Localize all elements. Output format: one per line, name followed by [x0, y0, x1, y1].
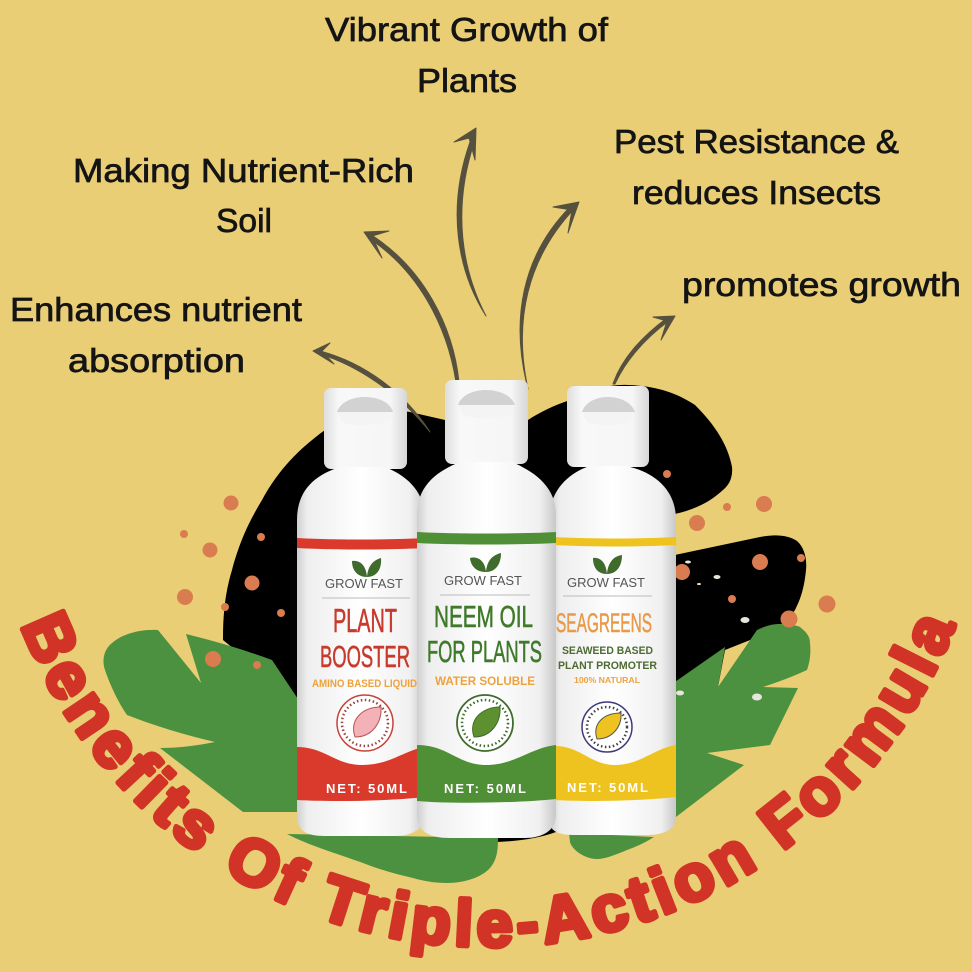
arrow: promotes growth [613, 316, 675, 384]
bottle: seagreens: GROW FAST [567, 575, 645, 590]
bottle: plant booster: GROW FAST [325, 576, 403, 591]
heading: nutrient-rich soil: Making Nutrient-Rich [73, 152, 414, 189]
heading: vibrant growth [325, 11, 609, 99]
bottle: seagreens: NET: 50ML [567, 780, 648, 795]
heading: nutrient-rich soil: Soil [216, 202, 272, 239]
heading: vibrant growth: Vibrant Growth of [325, 11, 609, 48]
heading: enhances absorption: Enhances nutrient [10, 291, 302, 328]
bottle: plant booster: BOOSTER [320, 639, 410, 674]
arrow: vibrant growth [454, 128, 486, 316]
heading: enhances absorption: absorption [68, 342, 245, 379]
bottle: plant booster: AMINO BASED LIQUID [312, 678, 417, 690]
curved title: Benefits Of Triple-Action Formula [20, 608, 958, 958]
bottle: neem oil: WATER SOLUBLE [435, 674, 535, 688]
white specks [676, 560, 762, 700]
heading: enhances absorption [10, 291, 302, 379]
bottle: plant booster [297, 388, 425, 836]
heading: pest resistance [614, 123, 899, 211]
bottle: seagreens: SEAGREENS [556, 608, 652, 638]
heading: pest resistance: Pest Resistance & [614, 123, 899, 160]
green leaf: left [103, 630, 300, 812]
green leaf: right [672, 624, 810, 820]
bottle: neem oil: GROW FAST [444, 573, 522, 588]
bottle: neem oil: NEEM OIL [434, 599, 533, 634]
green leaf: bottom left [287, 834, 498, 883]
speckle dots [177, 470, 836, 669]
heading: pest resistance: reduces Insects [632, 174, 881, 211]
arrow: pest resistance [520, 202, 579, 389]
arrow: nutrient-rich soil [364, 231, 459, 382]
bottle: seagreens: 100% NATURAL [574, 676, 640, 685]
bottle: neem oil [417, 380, 556, 838]
arrow: nutrient absorption [313, 343, 430, 432]
heading: vibrant growth: Plants [417, 62, 517, 99]
heading: nutrient-rich soil [73, 152, 414, 239]
bottle: neem oil: FOR PLANTS [427, 634, 542, 669]
bottle: seagreens: PLANT PROMOTER [558, 660, 657, 672]
green leaf: bottom right [569, 833, 654, 859]
bottle: plant booster: PLANT [333, 602, 397, 639]
bottle: plant booster: NET: 50ML [326, 781, 407, 796]
bottle: seagreens: SEAWEED BASED [562, 645, 653, 657]
bottle: neem oil: NET: 50ML [444, 781, 526, 796]
black blob [223, 385, 806, 842]
bottle: seagreens [550, 386, 676, 835]
heading: promotes growth: promotes growth [682, 266, 961, 303]
